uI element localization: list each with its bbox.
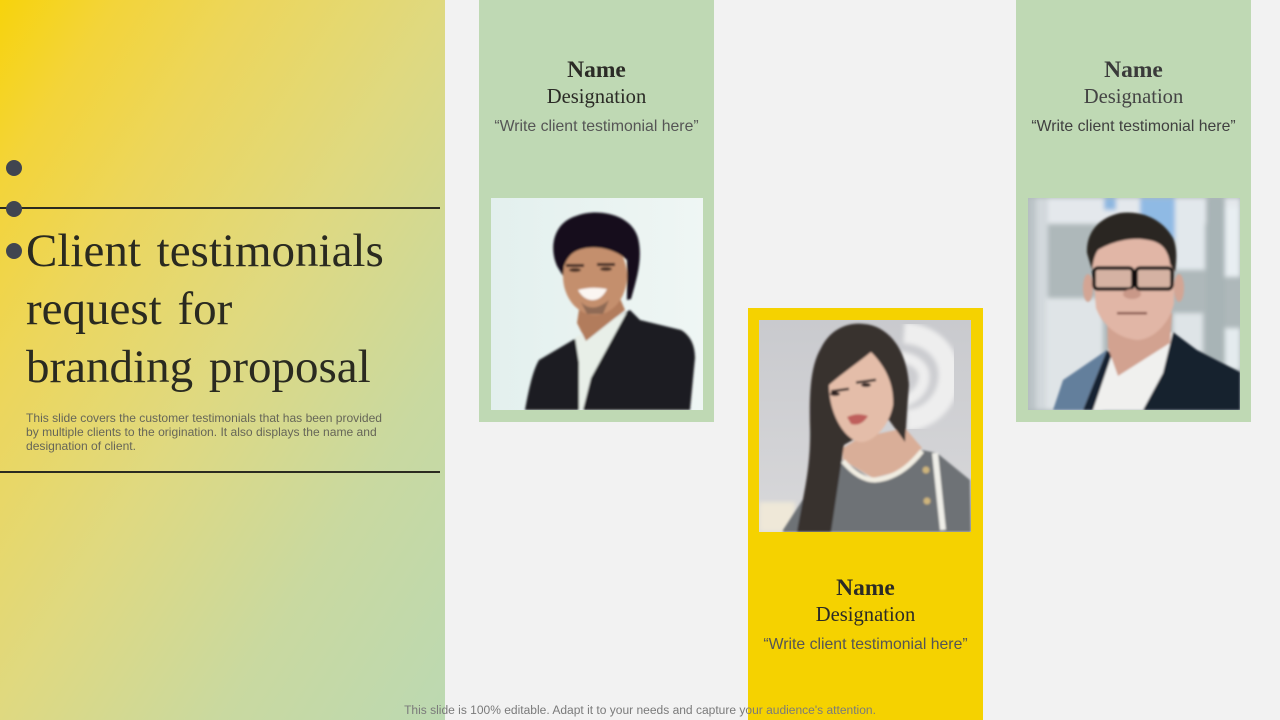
- bullet: first: [6, 160, 22, 176]
- title: request for: [26, 283, 232, 335]
- quote 3: “Write client testimonial here”: [1031, 118, 1236, 135]
- title: branding proposal: [26, 341, 371, 393]
- panel: testimonial card 2: [748, 308, 983, 720]
- top rule: [0, 207, 440, 209]
- bullet: second: [6, 201, 22, 217]
- quote 2: “Write client testimonial here”: [763, 636, 968, 653]
- title: [26, 225, 384, 393]
- left gradient panel: [0, 0, 445, 720]
- description: by multiple clients to the origination. It also displays the name and: [26, 425, 377, 439]
- name 2: Name: [836, 575, 895, 601]
- description: designation of client.: [26, 439, 136, 453]
- description: This slide covers the customer testimonials that has been provided: [26, 411, 382, 425]
- designation 3: Designation: [1084, 86, 1183, 108]
- photo: smiling man in black blazer: [491, 198, 703, 410]
- title: Client testimonials: [26, 225, 384, 277]
- panel: testimonial card 1: [479, 0, 714, 422]
- designation 2: Designation: [816, 604, 915, 626]
- bullet: third: [6, 243, 22, 259]
- description: [26, 411, 382, 453]
- quote 1: “Write client testimonial here”: [494, 118, 699, 135]
- designation 1: Designation: [547, 86, 646, 108]
- panel: testimonial card 3: [1016, 0, 1251, 422]
- photo: woman with long dark hair: [759, 320, 971, 532]
- photo: man with glasses: [1028, 198, 1240, 410]
- name 3: Name: [1104, 57, 1163, 83]
- bottom rule: [0, 471, 440, 473]
- footer note: This slide is 100% editable. Adapt it to your needs and capture your audience's attention.: [404, 703, 876, 717]
- name 1: Name: [567, 57, 626, 83]
